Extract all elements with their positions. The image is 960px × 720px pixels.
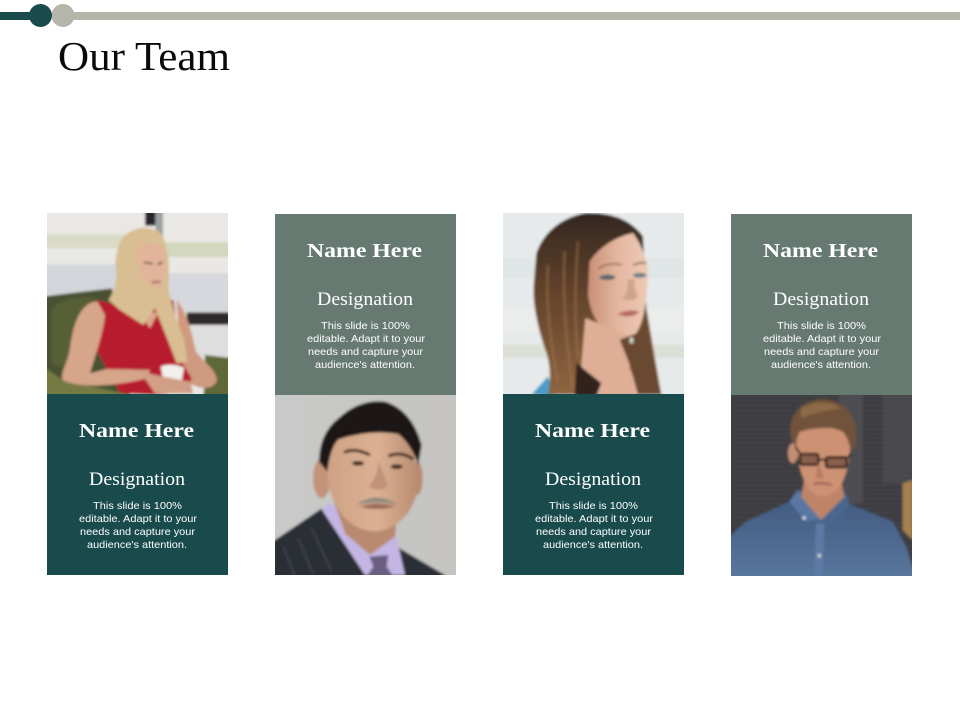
- designation: Designation: [89, 470, 185, 490]
- description: needs and capture your: [536, 526, 652, 538]
- description: [79, 500, 198, 551]
- description: needs and capture your: [308, 346, 424, 358]
- description: This slide is 100%: [549, 500, 638, 512]
- description: editable. Adapt it to your: [79, 513, 198, 525]
- description: [763, 320, 882, 371]
- description: audience's attention.: [315, 359, 415, 371]
- description: editable. Adapt it to your: [763, 333, 882, 345]
- description: audience's attention.: [543, 539, 643, 551]
- description: needs and capture your: [80, 526, 196, 538]
- description: [307, 320, 426, 371]
- designation: Designation: [545, 470, 641, 490]
- name: Name Here: [535, 420, 650, 442]
- description: editable. Adapt it to your: [307, 333, 426, 345]
- description: This slide is 100%: [777, 320, 866, 332]
- panel: name and designation: [503, 394, 684, 575]
- designation: Designation: [773, 290, 869, 310]
- description: editable. Adapt it to your: [535, 513, 654, 525]
- panel: name and designation: [275, 214, 456, 395]
- photo: woman in red with coffee cup: [47, 213, 228, 394]
- team member card 1: [40, 205, 240, 575]
- photo: woman with long brown hair: [503, 213, 684, 394]
- description: audience's attention.: [87, 539, 187, 551]
- top decorative bar: [0, 4, 960, 27]
- description: needs and capture your: [764, 346, 880, 358]
- description: audience's attention.: [771, 359, 871, 371]
- title: Our Team: [58, 33, 230, 79]
- team member card 2: [270, 214, 470, 590]
- description: This slide is 100%: [321, 320, 410, 332]
- description: [535, 500, 654, 551]
- panel: name and designation: [47, 394, 228, 575]
- name: Name Here: [307, 240, 422, 262]
- team member card 4: [726, 214, 926, 590]
- photo: man in pinstripe suit: [275, 395, 456, 575]
- name: Name Here: [763, 240, 878, 262]
- designation: Designation: [317, 290, 413, 310]
- photo: young man with glasses in denim shirt: [731, 395, 912, 576]
- panel: name and designation: [731, 214, 912, 395]
- name: Name Here: [79, 420, 194, 442]
- team member card 3: [498, 208, 698, 575]
- description: This slide is 100%: [93, 500, 182, 512]
